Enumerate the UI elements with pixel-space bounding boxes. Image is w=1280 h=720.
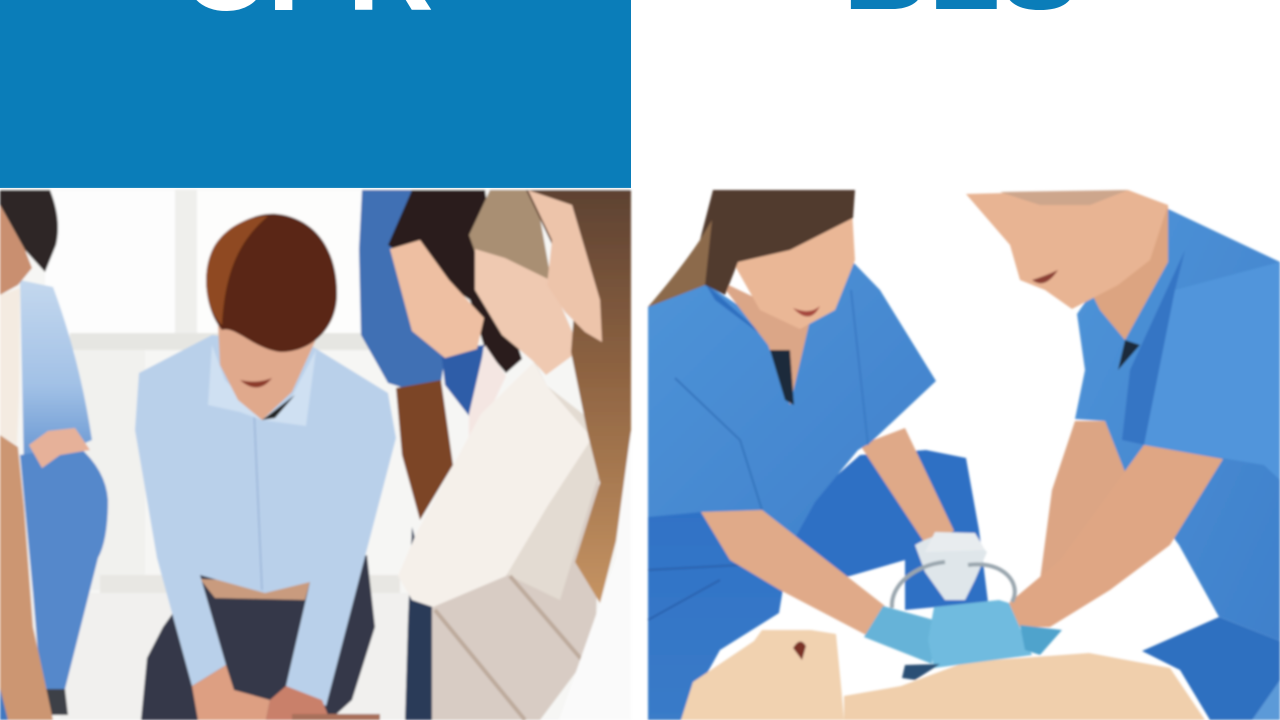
photo: CPR class (0, 189, 631, 720)
photo: BLS providers (648, 190, 1280, 720)
panel: CPR (0, 0, 631, 720)
manikin (681, 630, 1205, 720)
gloved hands (864, 600, 1062, 680)
person: trainee in white sweater (398, 190, 600, 720)
bag valve mask (892, 532, 1015, 608)
CPR header band (0, 0, 631, 188)
person: instructor doing compressions (135, 214, 396, 720)
person: female provider (648, 190, 988, 720)
person: male provider (966, 190, 1280, 720)
person: trainee with long hair (526, 190, 631, 720)
person: trainee in blue scrubs (359, 190, 522, 720)
person: left edge trainee (0, 190, 58, 720)
person: seated trainee in blue (20, 280, 108, 715)
panel: BLS (648, 0, 1280, 720)
